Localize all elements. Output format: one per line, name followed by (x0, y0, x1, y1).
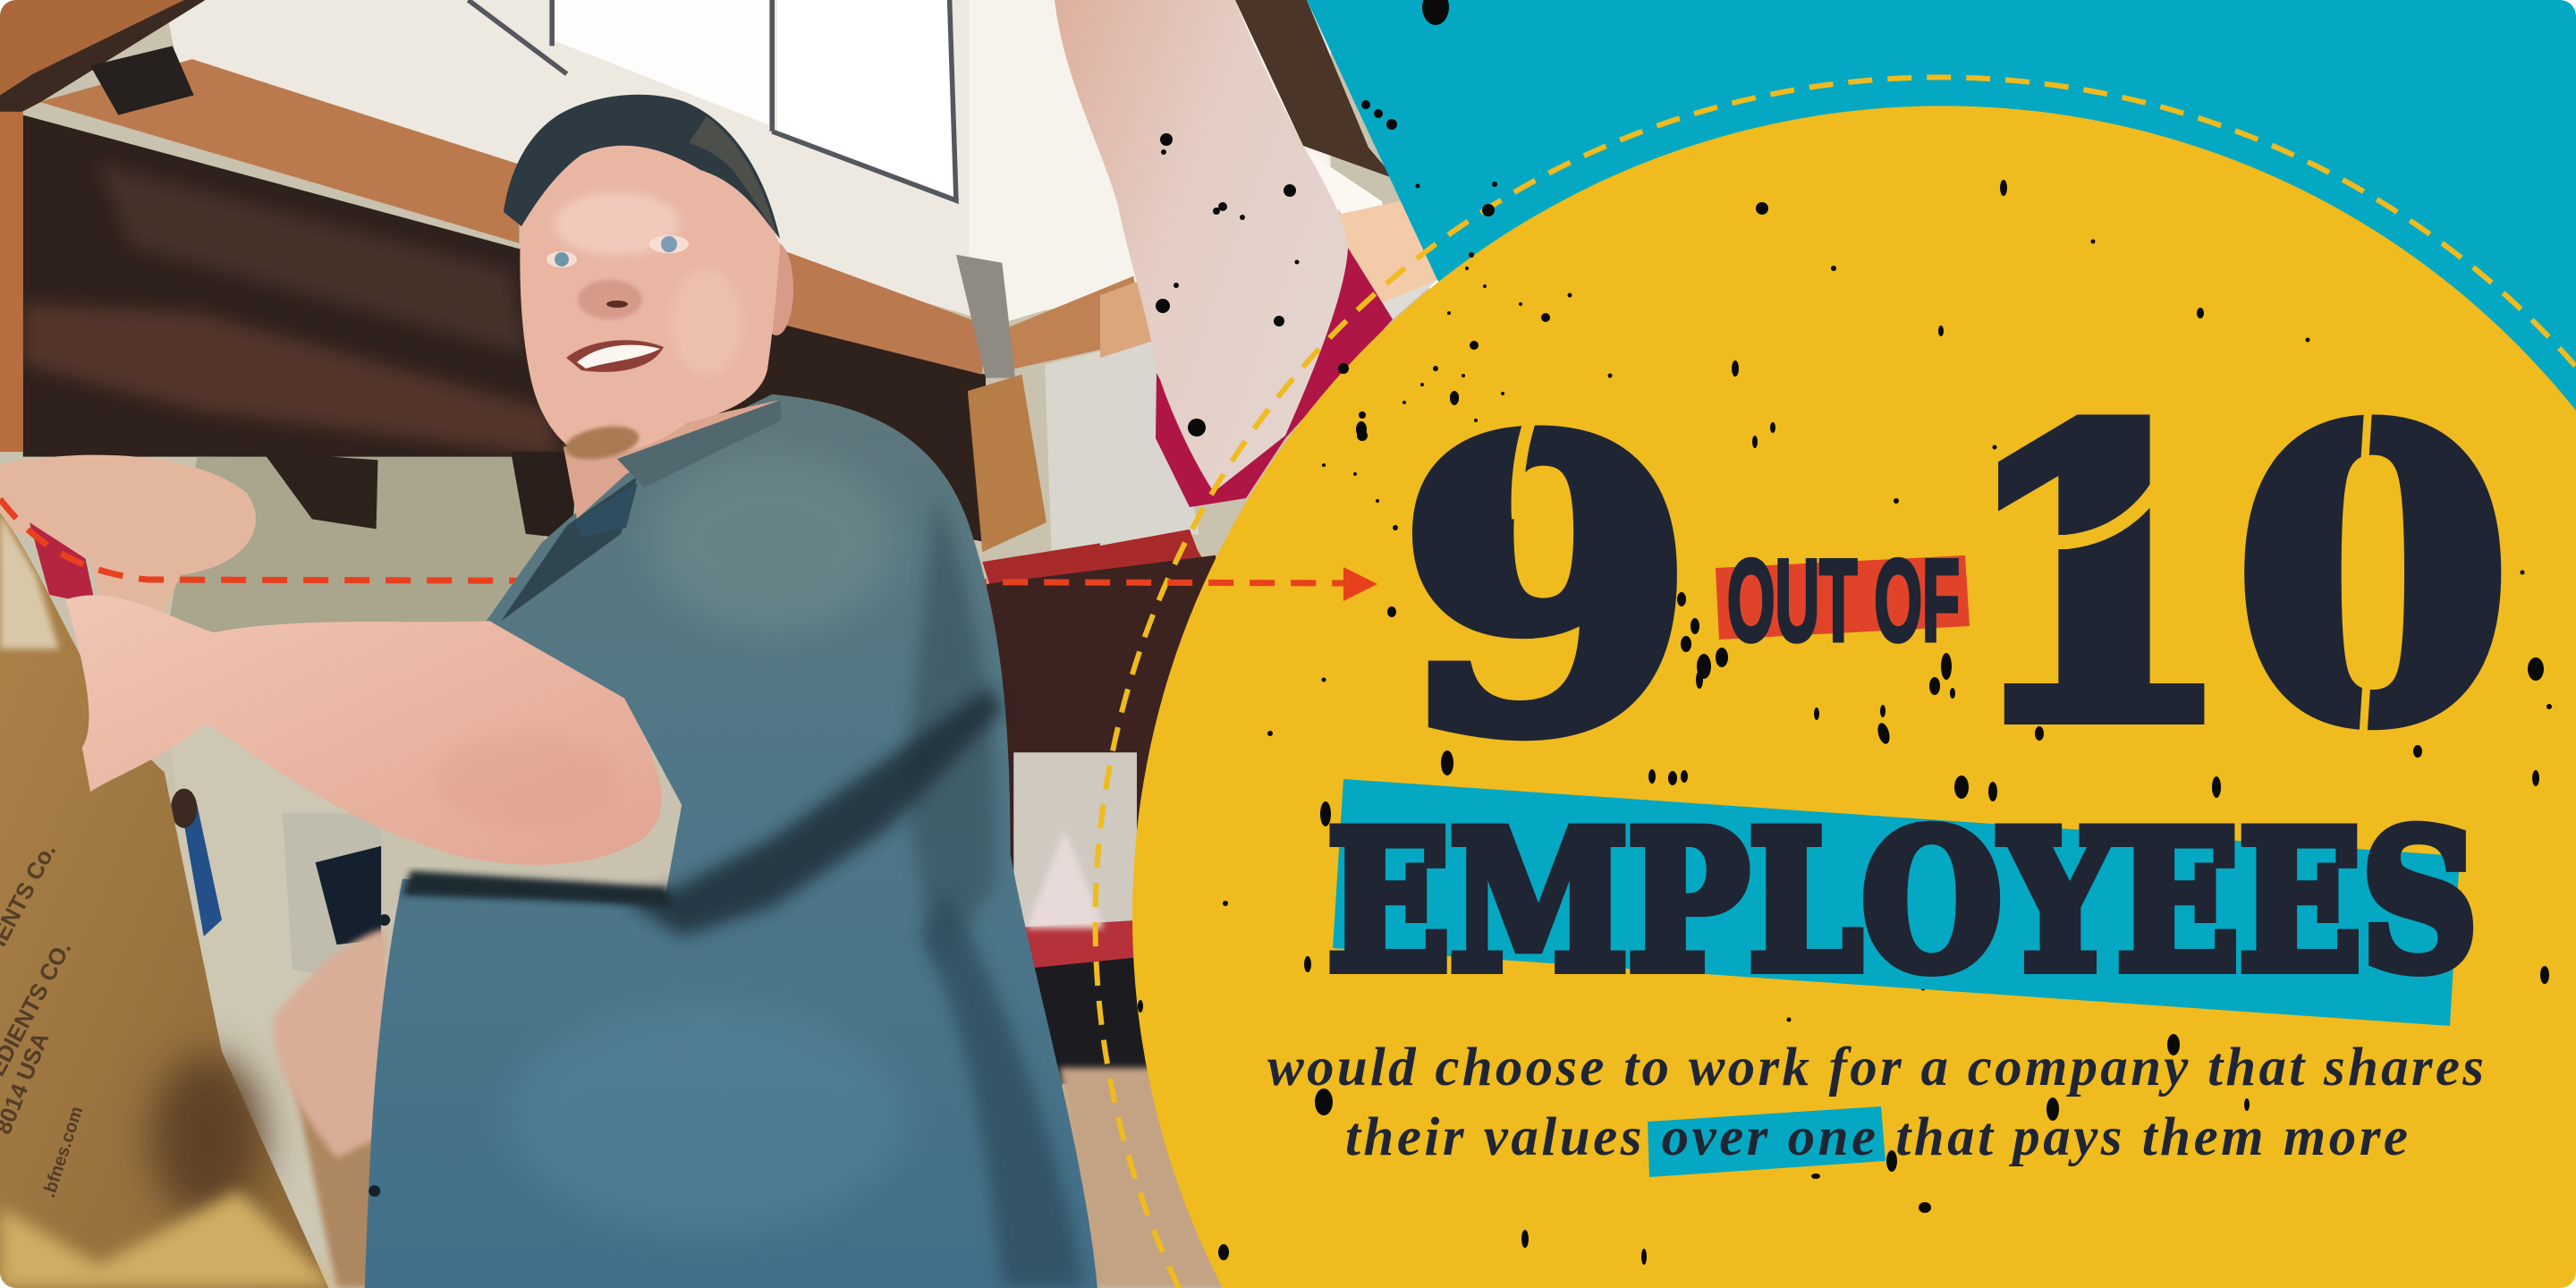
dashed yellow ring (1096, 77, 2576, 1288)
goatee (563, 421, 641, 464)
cap (504, 95, 780, 239)
face (520, 131, 780, 456)
photo: man's head with cap (504, 95, 793, 537)
dashed red arrow line (0, 499, 1377, 601)
neck (564, 400, 781, 519)
yellow circle panel (1132, 106, 2576, 1288)
photo: upper right wedge behind arm (1100, 0, 1437, 546)
photo: warehouse background (0, 0, 1429, 1288)
arrowhead (1343, 567, 1377, 601)
eyes (547, 251, 577, 267)
supporting sentence: would choose to work for a company that shares (1267, 1038, 2484, 1097)
ear (759, 242, 793, 335)
underarm crease (624, 687, 1002, 936)
photo: raised arm and red shirt (1055, 0, 1393, 507)
big number 9: 9 (1399, 357, 1694, 819)
teal EMPLOYEES swatch (1333, 779, 2460, 1026)
supporting sentence: their values over one that pays them more (1345, 1107, 2408, 1167)
nose (578, 280, 642, 319)
supporting sentence (1267, 1038, 2484, 1167)
teal corner panel (1307, 0, 2576, 572)
red OUT OF tag (1716, 535, 1970, 665)
teal over-one highlight (1648, 1106, 1885, 1177)
bag printed lettering: .bfnes.com (39, 1104, 87, 1200)
big number 10: 10 (1959, 346, 2511, 809)
arm and hand (65, 595, 662, 865)
shirt (365, 394, 1097, 1288)
bag printed lettering (0, 839, 87, 1200)
ink splatter (1138, 0, 2552, 1265)
smile (566, 340, 664, 372)
photo: man's shirt and arm (65, 394, 1097, 1288)
photo: foreground bag and left arm (0, 455, 386, 1288)
OUT OF label: OUT OF (1727, 535, 1960, 665)
